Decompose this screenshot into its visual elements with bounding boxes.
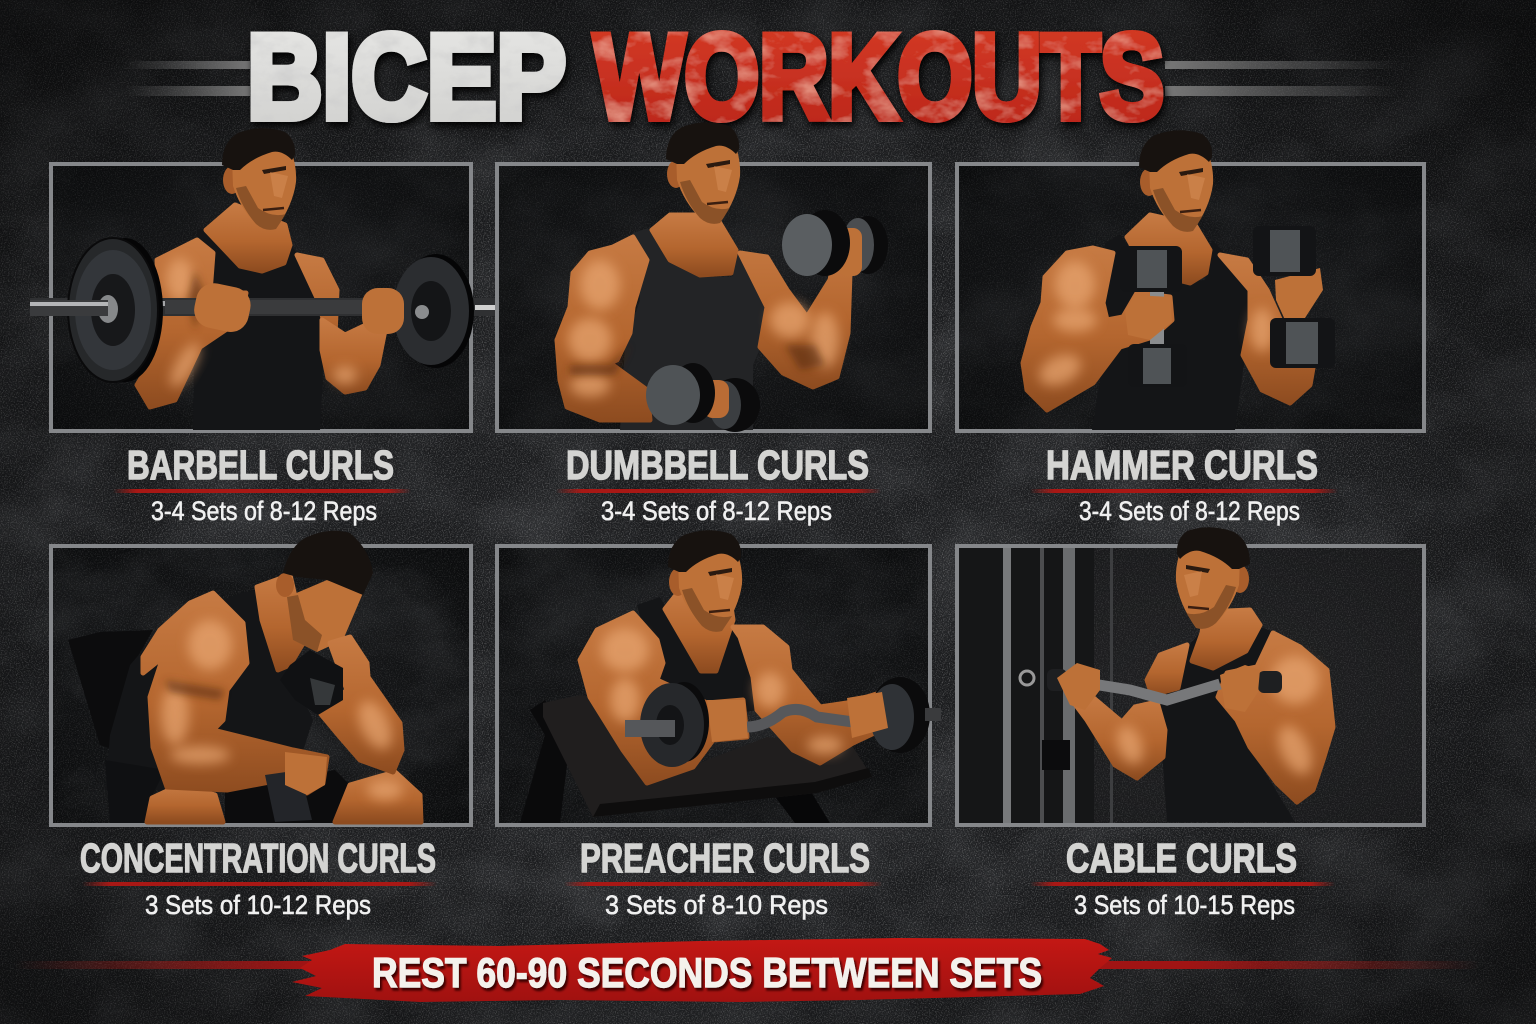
panel frame	[957, 164, 1424, 431]
label: hammer curls	[1030, 442, 1338, 526]
banner text: REST 60-90 SECONDS BETWEEN SETS	[372, 949, 1042, 996]
panel: barbell curls	[30, 128, 495, 431]
heading: BARBELL CURLS	[127, 442, 394, 488]
sets and reps: 3-4 Sets of 8-12 Reps	[1079, 496, 1300, 526]
panel: preacher curls	[497, 530, 941, 825]
panel: dumbbell curls	[497, 122, 930, 432]
title word: workouts: WORKOUTS	[594, 10, 1164, 144]
label: cable curls	[1030, 835, 1335, 920]
panel frame	[497, 164, 930, 431]
figure: hammer curl	[1023, 130, 1335, 430]
sets and reps: 3 Sets of 8-10 Reps	[605, 890, 828, 920]
panel frame	[51, 546, 471, 825]
tank top	[1092, 235, 1255, 430]
figure: concentration curl	[68, 531, 421, 823]
figure: cable curl	[959, 527, 1333, 823]
panel frame	[497, 546, 930, 825]
heading: PREACHER CURLS	[580, 835, 870, 881]
panel frame	[51, 164, 471, 431]
tank top and shorts	[105, 590, 313, 790]
heading: CONCENTRATION CURLS	[80, 835, 436, 881]
figure: preacher curl	[520, 530, 941, 823]
tank top	[637, 597, 757, 720]
title side lines left	[125, 61, 250, 96]
tank top	[620, 228, 768, 430]
panel: hammer curls	[957, 130, 1424, 431]
chair	[68, 630, 153, 750]
sets and reps: 3-4 Sets of 8-12 Reps	[151, 496, 377, 526]
panel: concentration curls	[51, 531, 471, 825]
label: dumbbell curls	[556, 442, 881, 526]
cable machine	[959, 548, 1113, 823]
sets and reps: 3 Sets of 10-12 Reps	[145, 890, 371, 920]
title	[125, 10, 1400, 144]
heading: DUMBBELL CURLS	[566, 442, 869, 488]
figure: barbell curl	[30, 128, 495, 430]
label: preacher curls	[564, 835, 882, 920]
sets and reps: 3-4 Sets of 8-12 Reps	[601, 496, 832, 526]
heading: HAMMER CURLS	[1046, 442, 1318, 488]
figure: dumbbell curl	[557, 122, 888, 432]
title word: bicep: BICEP	[247, 10, 566, 144]
label: concentration curls	[80, 835, 437, 920]
title side lines right	[1165, 61, 1400, 96]
label: barbell curls	[113, 442, 411, 526]
bench	[520, 700, 570, 823]
panel frame	[957, 546, 1424, 825]
tank top	[1157, 627, 1295, 822]
sets and reps: 3 Sets of 10-15 Reps	[1074, 890, 1295, 920]
banner brush stroke	[292, 938, 1112, 1002]
panel: cable curls	[957, 527, 1424, 825]
tank top	[193, 228, 327, 430]
banner: rest time	[15, 938, 1480, 1002]
heading: CABLE CURLS	[1066, 835, 1297, 881]
